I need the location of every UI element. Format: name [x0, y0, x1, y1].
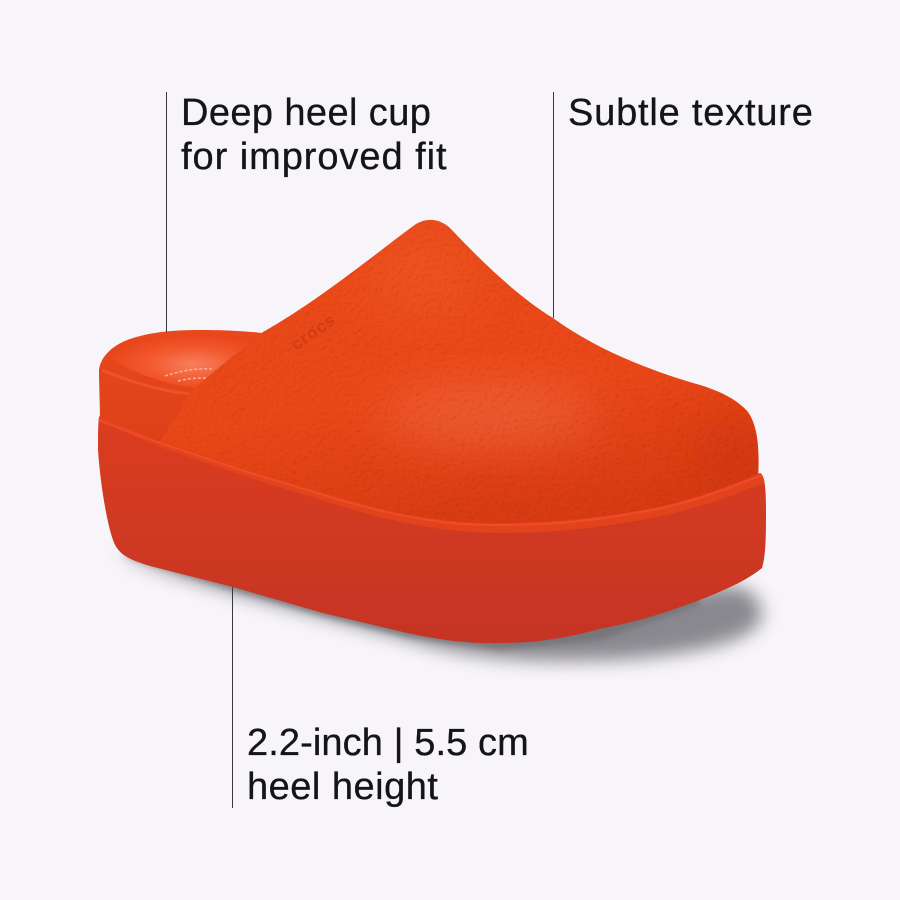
callout line: texture [553, 92, 554, 318]
illustration: orange platform clog [98, 220, 773, 674]
callout text: texture: Subtle texture [568, 92, 814, 134]
heel cup [99, 330, 270, 450]
callout line: heel cup [166, 92, 167, 332]
callout text: heel cup: for improved fit [181, 136, 448, 178]
ground shadow [118, 553, 762, 661]
callout text: heel cup: Deep heel cup [181, 92, 431, 134]
callout text: heel height [247, 722, 529, 808]
callout text: heel height: 2.2-inch | 5.5 cm [247, 722, 529, 764]
callout text: heel cup [181, 92, 448, 178]
callout line: heel height [232, 587, 233, 808]
upper with leather texture [160, 220, 759, 524]
callout text: heel height: heel height [247, 766, 438, 808]
platform sole [90, 405, 775, 650]
logo: crocs embossed text: crocs [287, 310, 340, 354]
